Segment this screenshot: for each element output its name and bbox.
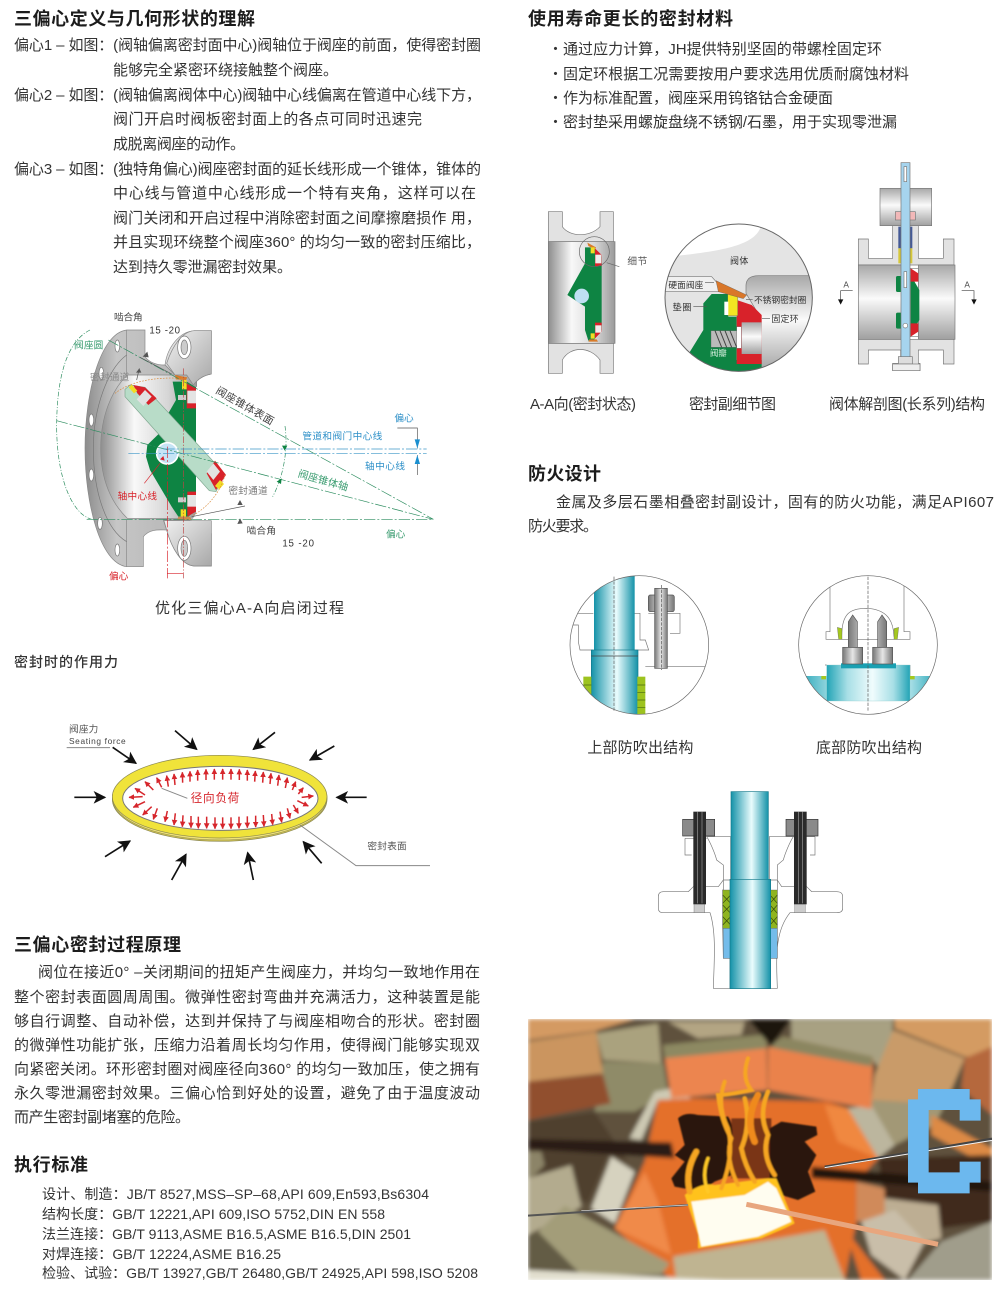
construction lines: [57, 330, 433, 578]
text block: fire safe: 防火要求。: [528, 518, 598, 535]
text block: three eccentric descriptions: 阀门关闭和开启过程中消除密封面之间摩擦磨损作 用，: [113, 209, 481, 227]
pale open disc: [125, 385, 225, 492]
diagrams: blowout structures: [570, 575, 938, 989]
text block: standards list: 结构长度：GB/T 12221,API 609,ISO 5752,DIN EN 558: [42, 1206, 385, 1222]
text block: three eccentric descriptions: 能够完全紧密环绕接触整个阀座。: [113, 61, 338, 79]
section arrows A: [838, 279, 977, 305]
diagram labels: 轴中心线: [365, 460, 405, 472]
caption: cutaway: 阀体解剖图(长系列)结构: [829, 396, 985, 413]
text block: standards list: 检验、试验：GB/T 13927,GB/T 26480,GB/T 24925,API 598,ISO 5208: [42, 1265, 478, 1281]
heading: standards: 执行标准: [14, 1155, 88, 1175]
lug top: [165, 331, 211, 388]
section arrows A: A: [843, 279, 849, 289]
seal rings: [129, 375, 226, 520]
ring labels: 密封表面: [367, 840, 407, 852]
diagram labels: 阀座锥体轴: [297, 467, 350, 494]
text block: material list: [548, 40, 909, 131]
black seating force arrows: [74, 731, 367, 880]
ring labels: 阀座力: [69, 723, 98, 735]
section A-A sealed: [548, 212, 619, 373]
rods: [746, 1204, 938, 1244]
diagrams: valve sections: [548, 163, 977, 373]
diagram labels: 偏心: [109, 570, 129, 582]
detail circle: 固定环: [771, 313, 799, 324]
body cutaway: [858, 163, 955, 371]
ring labels: [69, 723, 407, 852]
valve in the fire and flames: [671, 1058, 817, 1248]
ring labels: Seating force: [69, 736, 126, 746]
caption upper blowout: 上部防吹出结构: [587, 740, 693, 757]
text block: three eccentric descriptions: 阀门开启时阀板密封面上的各点可同时迅速完: [113, 110, 422, 128]
valve bore: [101, 375, 197, 518]
text block: material list: ・固定环根据工况需要按用户要求选用优质耐腐蚀材料: [548, 65, 909, 83]
text block: sealing process: [14, 964, 480, 1126]
diagram labels: 啮合角: [114, 312, 143, 324]
detail circle: 硬面阀座: [668, 279, 704, 290]
text block: sealing process: 够自行调整、自动补偿，达到并保持了与阀座相吻合的形状。密封圈: [14, 1013, 480, 1030]
text block: three eccentric descriptions: [14, 37, 481, 276]
caption lower blowout: 底部防吹出结构: [816, 740, 922, 757]
caption: seal detail: 密封副细节图: [689, 396, 776, 413]
heading: eccentric definition: 三偏心定义与几何形状的理解: [14, 8, 255, 29]
valve body flange: [85, 330, 190, 567]
seal ring: [112, 755, 327, 841]
red radial arrows: [129, 769, 313, 829]
text block: three eccentric descriptions: 达到持久零泄漏密封效果。: [113, 259, 292, 276]
ring labels: 径向负荷: [191, 791, 240, 805]
text block: fire safe: 金属及多层石墨相叠密封副设计，固有的防火功能，满足API607: [556, 494, 994, 511]
heading: longer life sealing material: 使用寿命更长的密封材料: [528, 8, 733, 29]
diagram labels: [74, 312, 414, 582]
upper blowout circle: [570, 575, 709, 717]
text block: standards list: 对焊连接：GB/T 12224,ASME B16.25: [42, 1246, 281, 1262]
furnace photograph painted as shapes: [528, 1019, 992, 1280]
diagram labels: 密封通道: [228, 485, 268, 497]
text block: sealing process: 的微弹性功能扩张，压缩力沿着周长均匀作用，使得阀门能够实现双: [14, 1037, 480, 1054]
text block: sealing process: 而产生密封副堵塞的危险。: [14, 1108, 190, 1126]
diagram labels: 偏心: [394, 412, 414, 424]
diagram labels: 阀座锥体表面: [213, 384, 277, 428]
detail circle: 不锈钢密封圈: [754, 294, 806, 305]
detail circle: 阀瓣: [710, 348, 727, 358]
caption: A-A sealed: A-A向(密封状态): [530, 396, 636, 413]
bolt holes: [89, 336, 191, 560]
heading: sealing process principle: 三偏心密封过程原理: [14, 934, 181, 955]
diagram labels: 阀座圆: [74, 340, 103, 352]
diagram labels: 管道和阀门中心线: [302, 430, 383, 442]
logo C: [908, 1089, 981, 1193]
text block: sealing process: 阀位在接近0° –关闭期间的扭矩产生阀座力，并均匀一致地作用在: [38, 964, 480, 981]
diagram labels: 密封通道: [90, 372, 130, 384]
lower blowout circle: [798, 576, 938, 714]
text block: three eccentric descriptions: 偏心2 – 如图：(阀轴偏离阀体中心)阀轴中心线偏离在管道中心线下方，: [14, 87, 481, 104]
detail circle: [663, 223, 817, 373]
diagram labels: 15 -20: [282, 539, 314, 550]
text block: sealing process: 向紧密关闭。环形密封圈对阀座径向360° 的均匀一致加压，使之拥有: [14, 1061, 480, 1078]
photo: fire test in furnace: [528, 1019, 992, 1280]
white cut: [192, 350, 217, 533]
text block: three eccentric descriptions: 成脱离阀座的动作。: [113, 136, 245, 153]
text block: material list: ・作为标准配置，阀座采用钨铬钴合金硬面: [548, 90, 833, 107]
diagram: triple eccentric geometry: [57, 312, 433, 582]
caption: open close process: 优化三偏心A-A向启闭过程: [155, 600, 344, 617]
text block: standards list: 法兰连接：GB/T 9113,ASME B16.5,ASME B16.5,DIN 2501: [42, 1226, 411, 1242]
green valve disc: [146, 382, 196, 517]
text block: standards list: [42, 1186, 478, 1281]
text block: standards list: 设计、制造：JB/T 8527,MSS–SP–68,API 609,En593,Bs6304: [42, 1186, 429, 1202]
diagram labels: 15 -20: [149, 325, 180, 336]
text block: sealing process: 永久零泄漏密封效果。三偏心恰到好处的设置，避免了由于温度波动: [14, 1085, 480, 1102]
diagram labels: 轴中心线: [118, 490, 157, 502]
text block: fire safe: [528, 494, 994, 535]
text block: three eccentric descriptions: 并且实现环绕整个阀座360° 的均匀一致的密封压缩比，: [113, 234, 481, 251]
text block: three eccentric descriptions: 偏心3 – 如图：(独特角偏心)阀座密封面的延长线形成一个锥体，锥体的: [14, 161, 481, 178]
text block: material list: ・密封垫采用螺旋盘绕不锈钢/石墨，用于实现零泄漏: [548, 113, 897, 131]
lug cover: [167, 331, 211, 385]
small arrow tips: [136, 352, 420, 524]
lug bottom: [163, 521, 211, 566]
diagram: seating force ring: [67, 723, 430, 880]
diagram labels: 啮合角: [247, 525, 276, 537]
packing assembly: [658, 792, 843, 989]
text block: three eccentric descriptions: 中心线与管道中心线形成一个特有夹角，这样可以在: [113, 185, 476, 202]
label detail: 细节: [627, 255, 648, 267]
heading: fire safe design: 防火设计: [528, 463, 601, 484]
section arrows A: A: [964, 279, 970, 289]
diagram labels: 偏心: [386, 528, 406, 540]
detail circle: 阀体: [730, 255, 748, 266]
text block: material list: ・通过应力计算，JH提供特别坚固的带螺栓固定环: [548, 40, 882, 58]
leader lines: [67, 748, 430, 866]
heading: sealing force: 密封时的作用力: [14, 654, 118, 670]
detail circle: 垫圈: [673, 302, 691, 313]
text block: sealing process: 整个密封表面圆周周围。微弹性密封弯曲并充满活力，这种装置是能: [14, 989, 480, 1006]
text block: three eccentric descriptions: 偏心1 – 如图：(阀轴偏离密封面中心)阀轴位于阀座的前面，使得密封圈: [14, 37, 481, 54]
